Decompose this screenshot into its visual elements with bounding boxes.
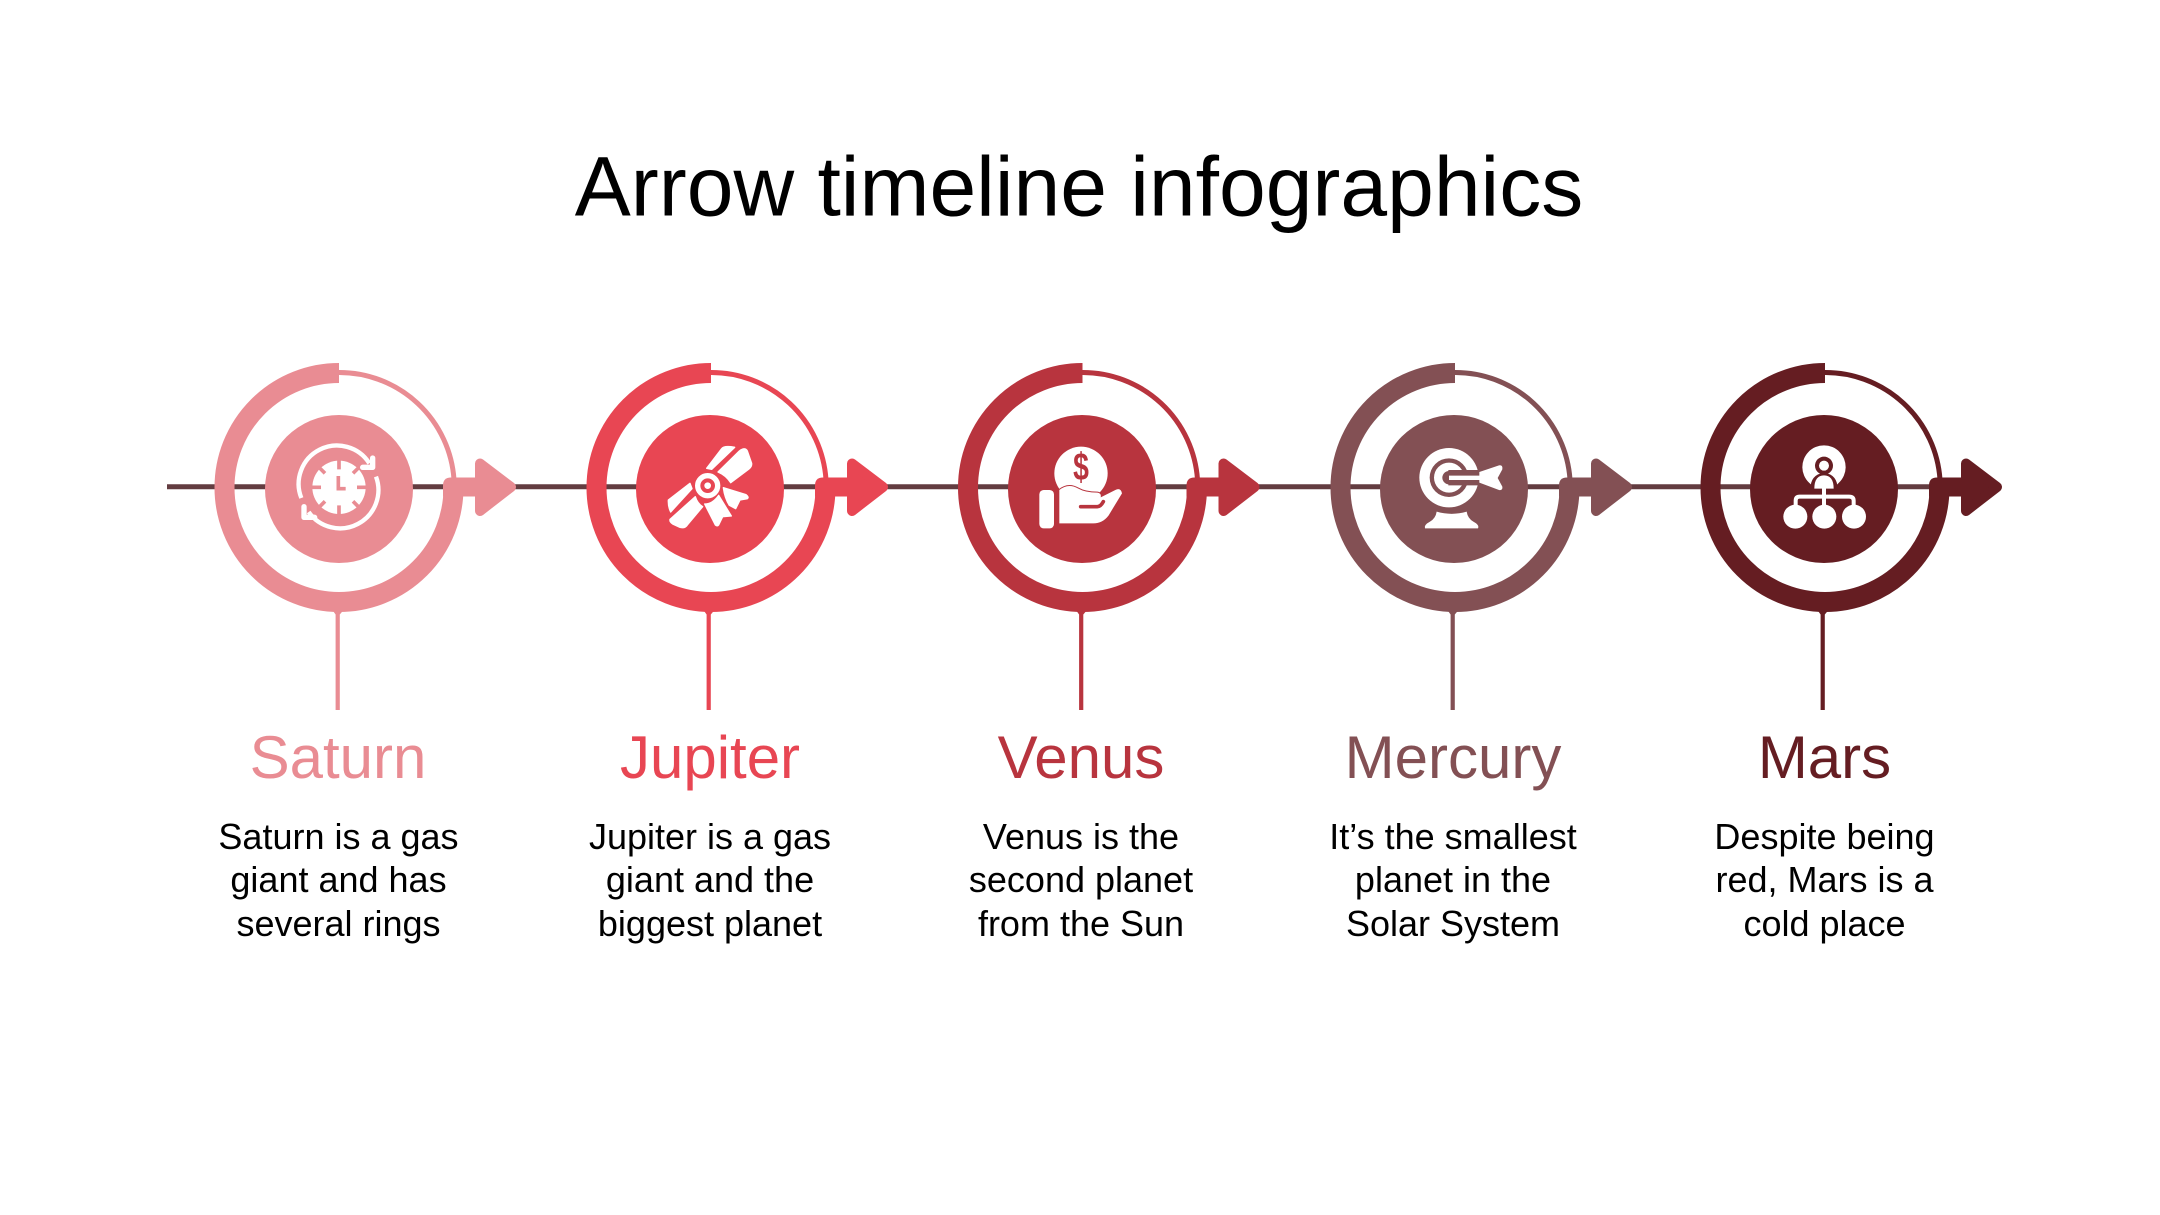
icon: person with organisation chart <box>1783 445 1866 529</box>
icon: hand holding coin <box>1039 446 1122 528</box>
description: Saturn: several rings <box>236 903 441 944</box>
label: Venus: Venus <box>998 724 1164 791</box>
panel: Mercury <box>1329 372 1627 944</box>
ring and arrow: Venus <box>968 372 1254 710</box>
description: Mars: red, Mars is a <box>1715 859 1935 900</box>
panel: Jupiter <box>589 372 883 944</box>
panel: Venus <box>968 372 1254 944</box>
label: Saturn: Saturn <box>250 724 426 791</box>
timeline axis line <box>167 484 2000 489</box>
icon: clock with circular arrows <box>299 446 378 528</box>
title: Arrow timeline infographics <box>575 140 1583 234</box>
description: Venus: second planet <box>969 859 1193 900</box>
description: Mercury: It’s the smallest <box>1329 816 1577 857</box>
label: Mercury: Mercury <box>1345 724 1561 791</box>
icon: diploma scroll <box>668 447 752 528</box>
description: Jupiter: biggest planet <box>598 903 822 944</box>
ring and arrow: Mars <box>1710 372 1997 710</box>
label: Jupiter: Jupiter <box>620 724 800 791</box>
label: Mars: Mars <box>1758 724 1891 791</box>
description: Jupiter: giant and the <box>606 859 814 900</box>
icon: hand holding coin: $ <box>1073 446 1089 489</box>
description: Venus: from the Sun <box>978 903 1184 944</box>
description: Mercury: Solar System <box>1346 903 1560 944</box>
icon: target with dart <box>1419 448 1502 528</box>
description: Venus: Venus is the <box>983 816 1179 857</box>
ring and arrow: Mercury <box>1340 372 1627 710</box>
ring and arrow: Jupiter <box>596 372 883 710</box>
description: Saturn: giant and has <box>230 859 447 900</box>
ring and arrow: Saturn <box>224 372 511 710</box>
panel: Mars <box>1710 372 1997 944</box>
description: Mars: cold place <box>1743 903 1906 944</box>
description: Mars: Despite being <box>1714 816 1935 857</box>
description: Jupiter: Jupiter is a gas <box>589 816 831 857</box>
description: Saturn: Saturn is a gas <box>218 816 459 857</box>
description: Mercury: planet in the <box>1355 859 1551 900</box>
panel: Saturn <box>218 372 511 944</box>
